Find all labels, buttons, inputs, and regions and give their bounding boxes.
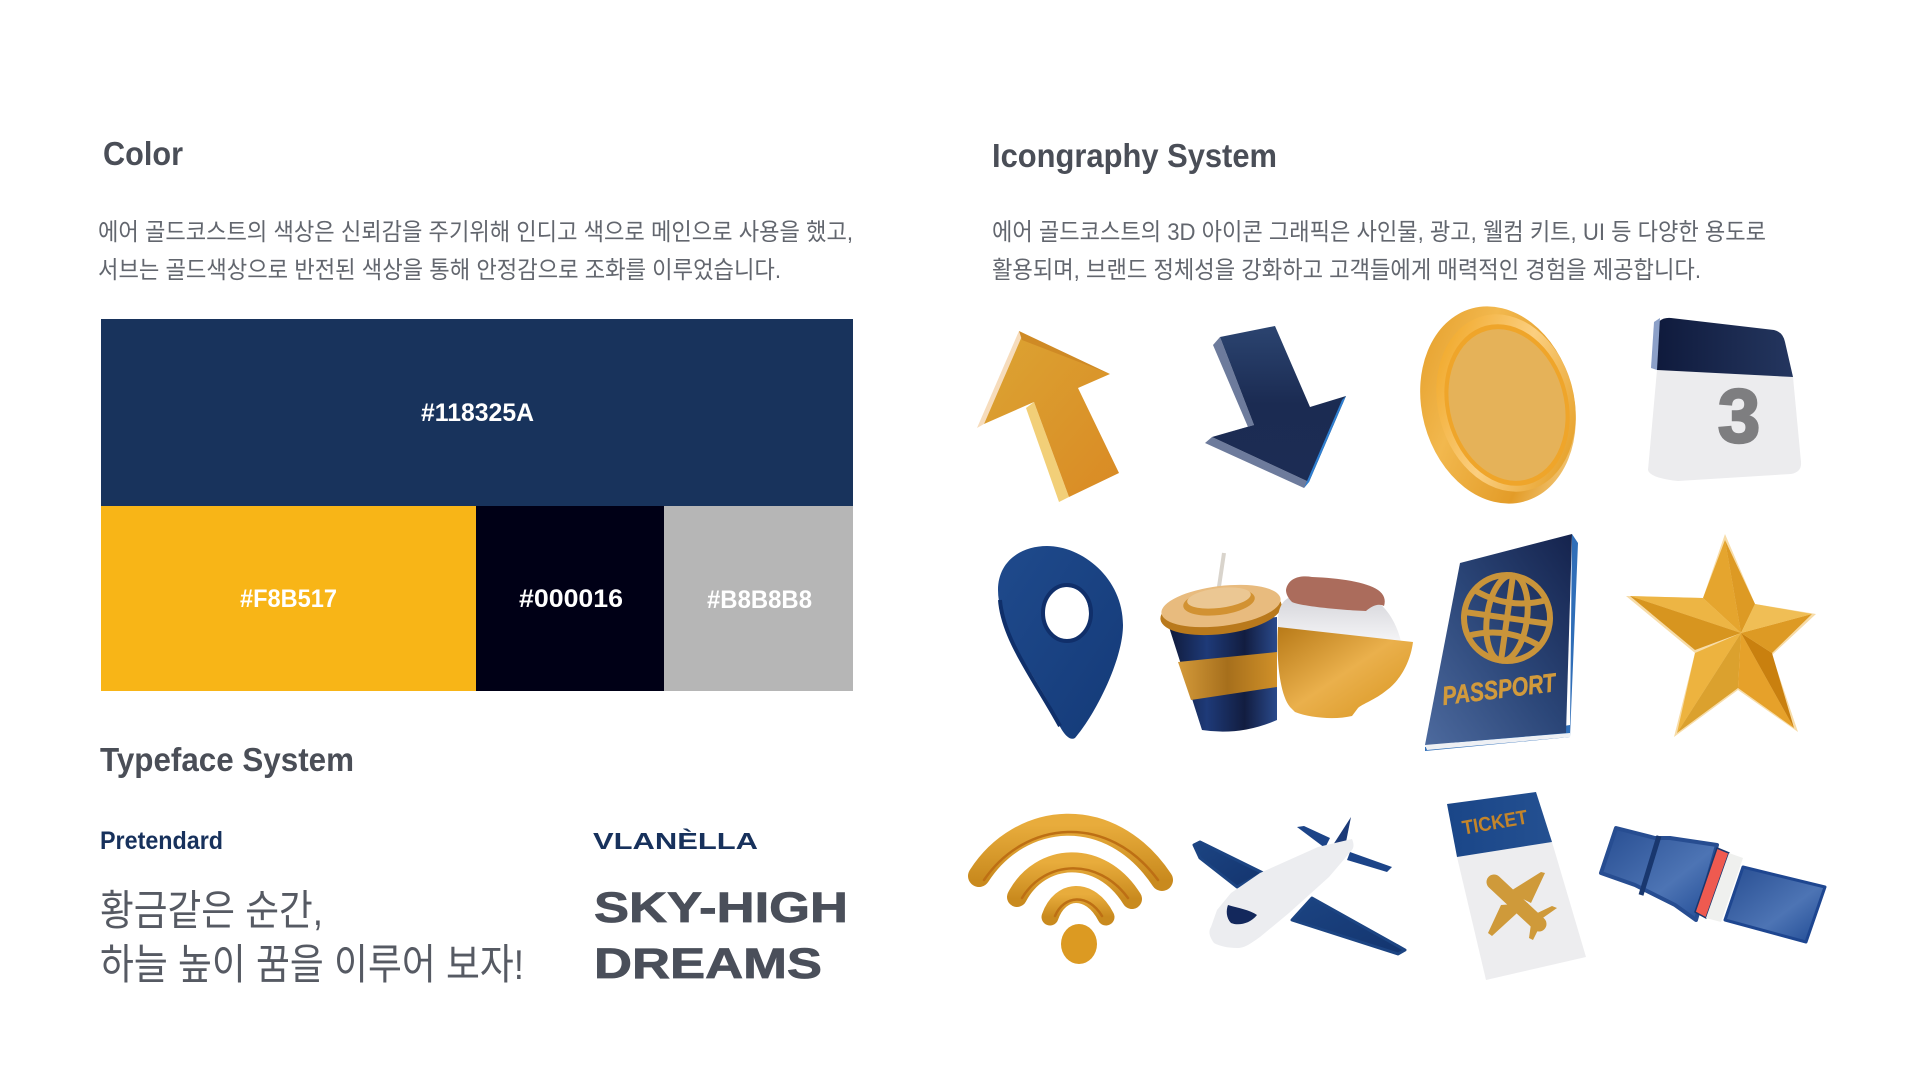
typeface sample: Korean: 황금같은 순간, xyxy=(100,887,323,934)
heading: Icongraphy System: Icongraphy System xyxy=(992,137,1277,174)
swatch: gold: #F8B517 xyxy=(240,585,337,613)
typeface sample: English: SKY-HIGH xyxy=(594,884,848,932)
icon: wifi signal xyxy=(979,825,1162,964)
icon: passport xyxy=(1425,534,1578,751)
topping xyxy=(1286,576,1385,611)
passport label: PASSPORT xyxy=(1441,667,1559,711)
calendar number: 3 xyxy=(1718,374,1760,459)
swatch: gray xyxy=(664,506,853,691)
icon: gold coin xyxy=(1399,289,1597,521)
typeface sample: Korean xyxy=(100,887,524,988)
swatch: black: #000016 xyxy=(519,585,623,613)
icon: seat belt xyxy=(1601,828,1825,942)
straw xyxy=(1217,553,1224,600)
typeface sample: Korean: 하늘 높이 꿈을 이루어 보자! xyxy=(100,941,524,988)
heading: Typeface System: Typeface System xyxy=(100,741,354,778)
typeface name: Pretendard: Pretendard xyxy=(100,827,223,855)
panel: color swatches xyxy=(101,319,853,691)
typeface name: Vlanella: VLANÈLLA xyxy=(593,827,758,854)
swatch: gray: #B8B8B8 xyxy=(707,586,812,614)
swatch: navy: #118325A xyxy=(421,399,534,427)
text block: color description xyxy=(98,219,853,284)
icon: map pin xyxy=(998,546,1123,739)
rice xyxy=(1278,596,1401,642)
text block: iconography description: 활용되며, 브랜드 정체성을 강화하고 고객들에게 매력적인 경험을 제공합니다. xyxy=(992,257,1701,284)
cup body xyxy=(1169,617,1277,732)
icon: up arrow xyxy=(977,331,1119,502)
globe emblem xyxy=(1458,569,1556,667)
text block: iconography description xyxy=(992,219,1766,284)
heading: Color: Color xyxy=(103,135,183,172)
cup lid xyxy=(1158,583,1284,641)
typeface sample: English: DREAMS xyxy=(594,940,822,988)
icon: airplane xyxy=(1194,817,1405,954)
swatch: black xyxy=(476,506,664,691)
bowl xyxy=(1278,627,1413,718)
ticket plane emblem xyxy=(1488,872,1557,940)
typeface sample: English xyxy=(594,884,848,988)
icon: ticket xyxy=(1447,792,1586,980)
fuselage xyxy=(1209,839,1354,948)
text block: color description: 서브는 골드색상으로 반전된 색상을 통해 안정감으로 조화를 이루었습니다. xyxy=(98,257,781,284)
icon: ticket: TICKET xyxy=(1461,807,1529,840)
icon: gold star xyxy=(1626,534,1816,737)
icon: down arrow xyxy=(1205,326,1346,488)
text block: iconography description: 에어 골드코스트의 3D 아이콘 그래픽은 사인물, 광고, 웰컴 키트, UI 등 다양한 용도로 xyxy=(992,219,1766,246)
icon: calendar xyxy=(1648,318,1801,481)
icon: drink and rice bowl xyxy=(1158,553,1413,732)
swatch: navy xyxy=(101,319,853,506)
text block: color description: 에어 골드코스트의 색상은 신뢰감을 주기위해 인디고 색으로 메인으로 사용을 했고, xyxy=(98,219,853,246)
swatch: gold xyxy=(101,506,476,691)
